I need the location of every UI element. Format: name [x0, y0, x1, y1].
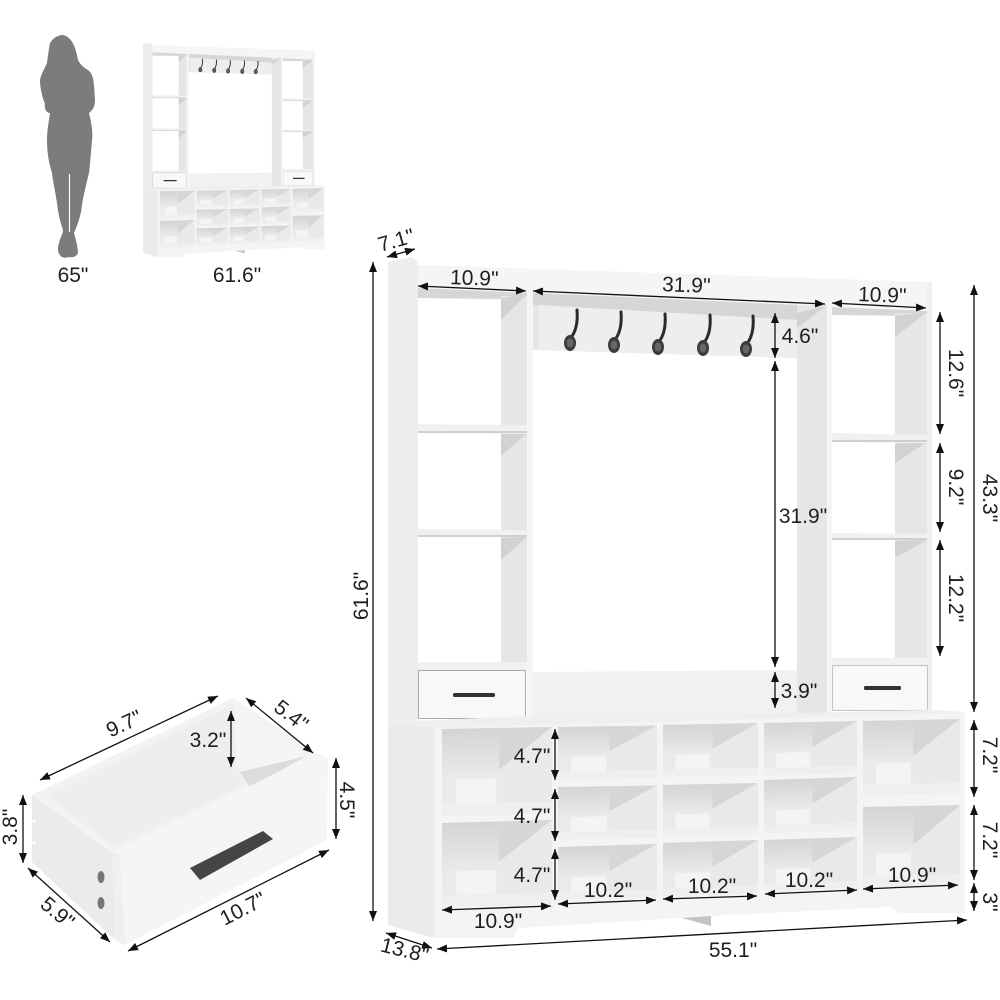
dimension: depth top: 7.1" — [375, 225, 417, 257]
dimension: front length — [128, 850, 329, 951]
dimension: left cubby width — [442, 906, 551, 933]
dimension: cubby width two — [663, 875, 757, 899]
dimension: back panel height: 3.9" — [781, 680, 817, 703]
dimension: inner height — [190, 711, 231, 767]
dimension: base height — [974, 883, 1000, 912]
dimension: cubby height one — [514, 729, 555, 780]
dimension: right cubby one — [974, 720, 1000, 797]
dimension: cubby width three: 10.2" — [785, 869, 833, 892]
dimension: hook board height — [775, 313, 818, 358]
dimension: right cubby width — [863, 864, 958, 889]
dimension: right compartment width — [832, 283, 926, 308]
dimension: right lower shelf: 12.2" — [944, 574, 967, 622]
panel: main hall tree — [388, 257, 965, 938]
dimension: right middle shelf — [940, 443, 967, 532]
dimension: left compartment width: 10.9" — [450, 266, 499, 291]
small hall tree — [143, 43, 325, 257]
dimension: right upper shelf: 12.6" — [944, 349, 967, 397]
dimension: back panel height — [775, 672, 817, 708]
panel: main dimensions — [350, 225, 1000, 968]
dimension: left compartment width — [418, 266, 526, 291]
dimension: drawer width inside: 5.4" — [269, 696, 313, 736]
dimension: side height — [0, 795, 23, 863]
dimension: mirror opening height: 31.9" — [779, 505, 827, 528]
dimension: center width — [533, 273, 825, 304]
dimension: drawer width inside — [246, 696, 313, 753]
icon: drawer holes — [32, 820, 104, 909]
dimension: cubby height two: 4.7" — [514, 805, 550, 828]
dimension: cubby width one: 10.2" — [584, 879, 632, 902]
label: person height: 65" — [58, 264, 88, 287]
dimension: right middle shelf: 9.2" — [944, 469, 967, 505]
dimension: inner height: 3.2" — [190, 729, 226, 752]
dimension: total height: 61.6" — [350, 572, 373, 620]
dimension: center width: 31.9" — [662, 273, 711, 298]
drawer illustration — [32, 698, 328, 945]
dimension: total width: 55.1" — [709, 939, 757, 962]
dimension: hook board height: 4.6" — [782, 325, 818, 348]
dimension: cubby height two — [514, 789, 555, 841]
panel: drawer detail — [0, 696, 358, 951]
dimension: side depth: 5.9" — [36, 892, 79, 934]
dimension: cubby width three — [765, 869, 857, 894]
dimension: cubby height three: 4.7" — [514, 864, 550, 887]
dimension: total depth: 13.8" — [378, 934, 431, 968]
dimension: side depth — [28, 868, 110, 942]
label: overall height: 61.6" — [213, 264, 261, 287]
dimension: cubby height three — [514, 849, 555, 900]
dimension: front height: 4.5" — [335, 782, 358, 818]
dimension: drawer length inside — [40, 696, 218, 780]
dimension: right cubby width: 10.9" — [888, 864, 936, 887]
dimension: cubby height one: 4.7" — [514, 745, 550, 768]
dimension: drawer length inside: 9.7" — [103, 706, 146, 742]
dimension: right compartment width: 10.9" — [858, 283, 907, 308]
dimension: cubby width two: 10.2" — [688, 875, 736, 898]
dimension: front length: 10.7" — [216, 888, 270, 930]
dimension: cubby width one — [558, 879, 656, 904]
dimension: front height — [335, 758, 358, 839]
icon: drawer handle — [190, 831, 273, 880]
dimension: total width — [437, 920, 967, 962]
icon: woman silhouette — [40, 35, 95, 258]
panel: size comparison — [40, 35, 325, 287]
dimension: left cubby width: 10.9" — [474, 910, 522, 933]
dimension: right upper shelf — [940, 312, 967, 434]
dimension: right cubby two — [974, 805, 1000, 880]
dimension: right lower shelf — [940, 540, 967, 656]
